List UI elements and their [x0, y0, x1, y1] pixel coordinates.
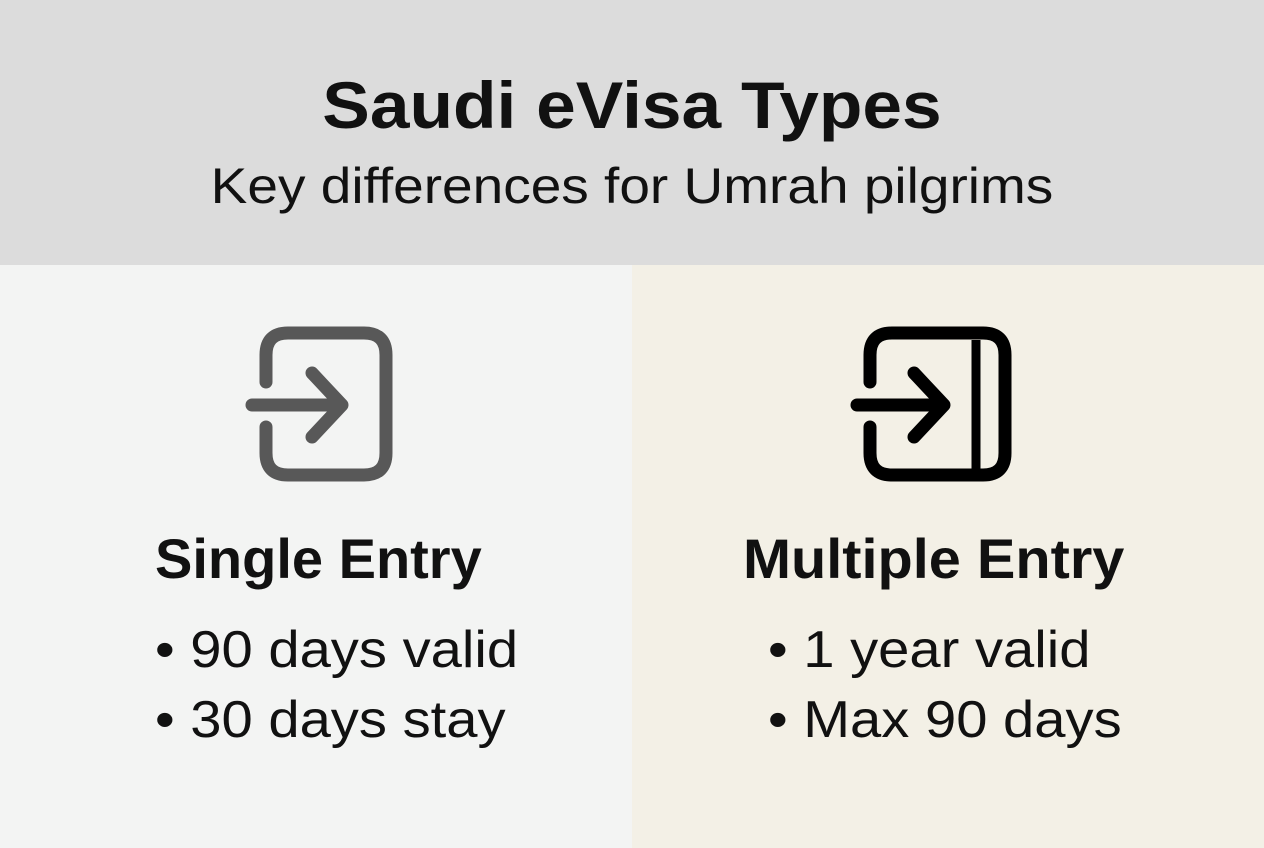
bullet list — [155, 621, 518, 749]
icon: multiple entry — [850, 326, 1012, 482]
heading: Multiple Entry: Multiple Entry — [743, 527, 1124, 590]
bullet list: • Max 90 days — [768, 691, 1122, 749]
heading: Single Entry: Single Entry — [155, 527, 482, 590]
title: Saudi eVisa Types — [322, 68, 942, 142]
bullet list: • 90 days valid — [155, 621, 518, 679]
panel: single entry — [0, 265, 632, 848]
header band — [0, 0, 1264, 265]
bullet list: • 1 year valid — [768, 621, 1090, 679]
bullet list — [768, 621, 1122, 749]
subtitle: Key differences for Umrah pilgrims — [211, 158, 1053, 214]
panel: multiple entry — [632, 265, 1264, 848]
bullet list: • 30 days stay — [155, 691, 506, 749]
icon: single entry — [246, 326, 392, 482]
